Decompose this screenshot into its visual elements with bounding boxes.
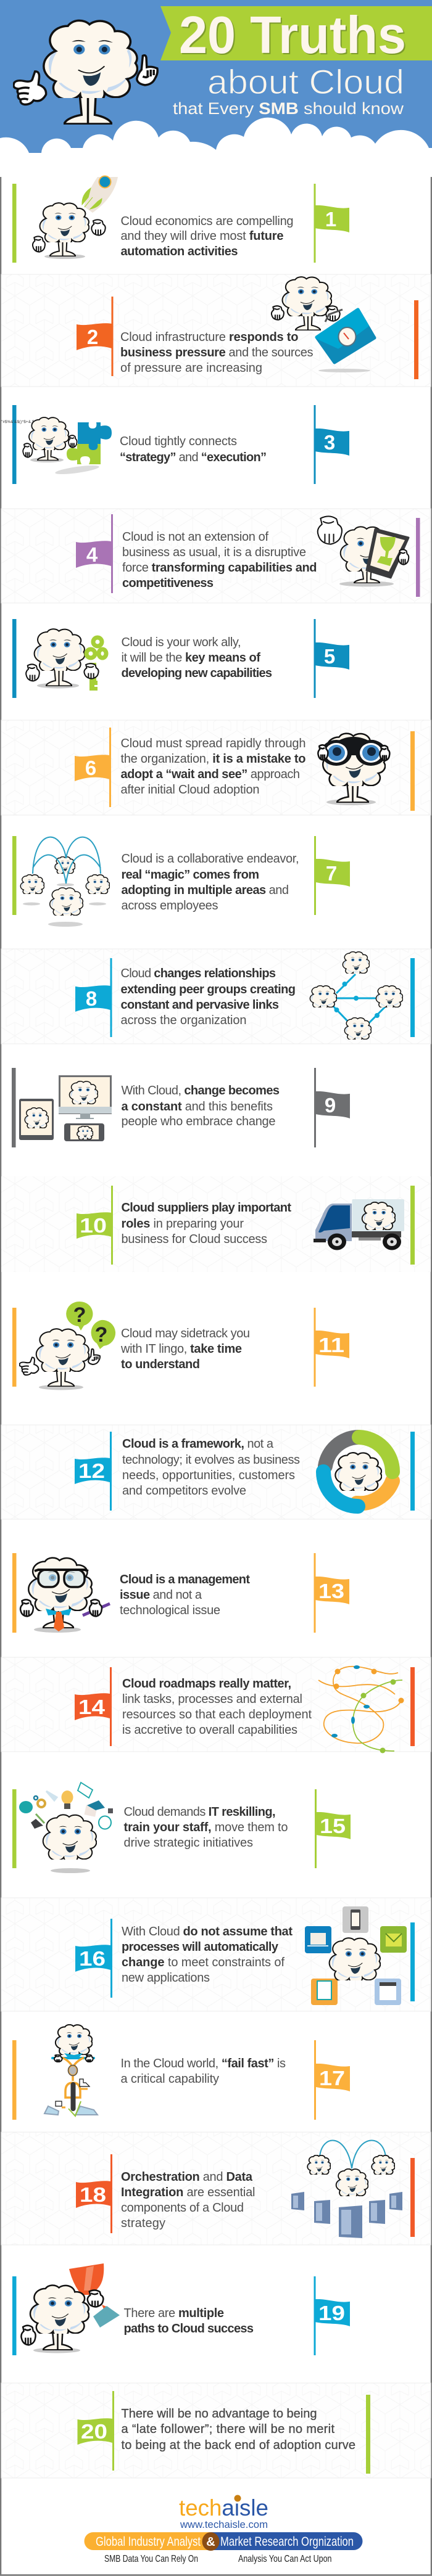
flag 15	[317, 1812, 351, 1839]
bars	[12, 1789, 317, 1868]
text: new applications	[122, 1971, 210, 1985]
text	[120, 330, 314, 375]
band	[1, 2132, 431, 2245]
flag 11	[315, 1331, 349, 1358]
row 6	[1, 720, 431, 815]
flag 4: 4	[86, 543, 98, 566]
graphic: clouds and servers	[291, 2141, 402, 2238]
text: link tasks, processes and external	[122, 1692, 302, 1706]
text: resources so that each deployment	[122, 1708, 312, 1721]
row 8	[1, 949, 431, 1044]
band	[1, 509, 431, 603]
text	[120, 1573, 250, 1617]
bars	[12, 1553, 316, 1633]
band	[1, 720, 431, 815]
text: force transforming capabilities and	[122, 561, 317, 575]
band	[1, 1425, 431, 1519]
flag 5	[315, 642, 349, 670]
row 19	[12, 2263, 350, 2355]
icon: rocket	[82, 176, 118, 213]
title ribbon	[160, 6, 432, 60]
text	[121, 215, 294, 258]
row 14	[1, 1657, 431, 1754]
slogan left: SMB Data You Can Rely On	[104, 2554, 198, 2564]
text	[121, 737, 306, 797]
flag 12: 12	[78, 1459, 105, 1482]
icon: clipboard tile	[311, 1979, 338, 2005]
row 12	[1, 1425, 431, 1519]
flag 3: 3	[324, 431, 335, 454]
text: business for Cloud success	[121, 1233, 267, 1246]
icon: chart	[87, 1800, 105, 1810]
mascot with binoculars	[318, 734, 389, 805]
text: Integration are essential	[121, 2186, 255, 2199]
mascot with question bubbles	[20, 1302, 115, 1390]
mascot on unicycle	[44, 2025, 98, 2116]
text: needs, opportunities, customers	[122, 1469, 295, 1482]
text	[120, 435, 267, 464]
text	[121, 852, 299, 913]
bars	[12, 836, 316, 915]
band	[1, 2383, 431, 2478]
text: across employees	[121, 899, 218, 913]
graphic: linked clouds	[310, 952, 403, 1041]
tagline pill: Global Industry Analyst	[96, 2535, 201, 2549]
text	[121, 967, 296, 1027]
text: Cloud roadmaps really matter,	[122, 1677, 291, 1691]
flag 9: 9	[325, 1094, 336, 1117]
tagline pill: &	[206, 2535, 215, 2549]
row 9	[12, 1068, 350, 1147]
text: paths to Cloud success	[123, 2322, 254, 2336]
chart: ring around cloud	[323, 1437, 393, 1506]
text: to understand	[121, 1358, 200, 1371]
text	[121, 2170, 255, 2230]
text	[122, 530, 317, 590]
icon: calendar tile	[375, 1979, 401, 2005]
row 17	[12, 2025, 350, 2120]
mascot with trophy	[21, 2263, 120, 2353]
text: “strategy” and “execution”	[120, 451, 267, 464]
flag 3	[315, 429, 349, 456]
bars	[12, 184, 316, 263]
flag 11: 11	[318, 1334, 344, 1356]
text: extending peer groups creating	[121, 983, 296, 996]
flag 19: 19	[318, 2302, 345, 2324]
subtitle: that every SMB: that Every SMB should know	[173, 99, 404, 118]
icon: clock	[99, 1816, 111, 1829]
flag 12	[75, 1458, 110, 1484]
logo: techaisle: techaisle	[179, 2495, 268, 2521]
icon: gear	[38, 1800, 45, 1807]
cloud bank	[0, 118, 432, 176]
graphic: roadmap paths	[318, 1665, 404, 1754]
text: across the organization	[121, 1014, 247, 1027]
text: constant and pervasive links	[121, 998, 279, 1012]
flag 13: 13	[318, 1580, 344, 1602]
icon: laptop tile	[305, 1926, 331, 1953]
bars	[12, 1308, 316, 1387]
bars	[111, 514, 420, 597]
flag 14	[75, 1693, 110, 1720]
flag 20	[78, 2418, 112, 2445]
icon: mail tile	[380, 1926, 407, 1953]
mascot with key	[26, 629, 106, 691]
flag 7: 7	[326, 862, 337, 885]
text: Cloud is not an extension of	[122, 530, 268, 544]
text: of pressure are increasing	[120, 361, 262, 375]
graphic: devices	[19, 1075, 112, 1141]
text: adopt a “wait and see” approach	[121, 768, 300, 781]
row 2	[1, 274, 431, 387]
mascot with puzzle	[23, 417, 112, 476]
text: train your staff, move them to	[123, 1821, 288, 1834]
flag 1	[315, 205, 349, 232]
text	[121, 1084, 280, 1128]
bars	[12, 2276, 316, 2355]
bars	[12, 2040, 316, 2120]
bars	[111, 297, 418, 379]
header sky	[0, 0, 432, 157]
text: With Cloud, change becomes	[121, 1084, 280, 1097]
flag 13	[315, 1577, 349, 1604]
title: 20 Truths	[179, 6, 406, 65]
text: roles in preparing your	[121, 1217, 244, 1231]
text: Cloud may sidetrack you	[121, 1327, 250, 1340]
row 3	[1, 405, 349, 484]
graphic: app icons around cloud	[305, 1906, 407, 2005]
mascot	[33, 203, 106, 259]
band	[1, 1657, 431, 1752]
text: is accretive to overall capabilities	[122, 1723, 297, 1737]
row 16	[1, 1898, 431, 2011]
text	[121, 1201, 291, 1246]
flag 9	[316, 1091, 350, 1118]
flag 7	[316, 859, 350, 887]
flag 17: 17	[319, 2067, 345, 2090]
text: Cloud must spread rapidly through	[121, 737, 306, 750]
mascot with question bubbles: ?	[73, 1303, 86, 1327]
text: Cloud changes relationships	[121, 967, 276, 980]
text	[122, 1925, 293, 1985]
text	[121, 2057, 286, 2086]
icon: bulb	[62, 1790, 73, 1809]
mascot with question bubbles: ?	[95, 1323, 107, 1347]
text: change to meet constraints of	[122, 1956, 285, 1969]
flag 10: 10	[80, 1214, 107, 1237]
text: and competitors evolve	[122, 1484, 246, 1498]
subtitle: about Cloud: about Cloud	[207, 62, 404, 101]
flag 19	[315, 2299, 350, 2326]
text: In the Cloud world, “fail fast” is	[121, 2057, 286, 2070]
text: There will be no advantage to being	[121, 2407, 317, 2421]
text: Cloud is a framework, not a	[122, 1437, 274, 1451]
text: Cloud is a collaborative endeavor,	[121, 852, 299, 866]
flag 20: 20	[81, 2420, 107, 2443]
text: Cloud tightly connects	[120, 435, 237, 448]
text: strategy	[121, 2217, 165, 2230]
text: There are multiple	[123, 2307, 224, 2320]
text: automation activities	[121, 245, 238, 258]
band	[1, 1176, 431, 1272]
bars	[111, 1186, 415, 1265]
text: Cloud economics are compelling	[121, 215, 294, 228]
icon: small box	[108, 1808, 113, 1813]
bars	[12, 619, 316, 698]
flag 4	[76, 541, 111, 568]
text	[123, 2307, 254, 2336]
text	[121, 636, 272, 680]
row 5	[12, 619, 349, 698]
flag 2: 2	[87, 326, 98, 348]
text: people who embrace change	[121, 1115, 275, 1128]
text: the organization, it is a mistake to	[121, 752, 306, 766]
text: a constant and this benefits	[121, 1100, 273, 1114]
graphic: truck	[314, 1199, 404, 1250]
text	[122, 1437, 300, 1498]
flag 8: 8	[86, 987, 97, 1010]
band	[1, 949, 431, 1044]
row 13	[12, 1553, 349, 1633]
text: Cloud demands IT reskilling,	[123, 1805, 275, 1819]
mascot with glasses and tie	[20, 1558, 110, 1633]
bars	[110, 2154, 415, 2237]
text	[121, 2407, 355, 2452]
tagline pill: Market Research Orgnization	[220, 2535, 354, 2549]
icon: calendar	[85, 1805, 97, 1817]
bars	[110, 1667, 415, 1746]
text: and they will drive most future	[121, 229, 284, 243]
row 20	[1, 2383, 431, 2478]
header	[0, 0, 432, 176]
row 11	[12, 1302, 349, 1390]
text: developing new capabilities	[121, 667, 272, 680]
stray label: "#$%&'&$()*$+&,$./0$1,$	[1, 420, 48, 424]
flag 17	[316, 2064, 350, 2091]
bars	[110, 1919, 415, 2001]
flag 2	[77, 323, 112, 350]
flag 16	[75, 1945, 110, 1972]
text: Orchestration and Data	[121, 2170, 253, 2184]
text: technological issue	[120, 1604, 220, 1617]
bars	[12, 405, 316, 484]
flag 10	[77, 1212, 112, 1239]
text	[122, 1677, 312, 1737]
footer	[84, 2495, 363, 2564]
icon: megaphone	[31, 1819, 43, 1829]
icon: document	[78, 1782, 93, 1798]
text: drive strategic initiatives	[123, 1836, 253, 1850]
mascot with ideas	[19, 1782, 113, 1873]
bars	[110, 958, 415, 1037]
text: after initial Cloud adoption	[121, 783, 259, 797]
text: Cloud is a management	[120, 1573, 250, 1586]
text: processes will automatically	[122, 1940, 279, 1954]
bars	[112, 2391, 370, 2474]
flag 18: 18	[80, 2183, 106, 2206]
text: business pressure and the sources	[120, 346, 314, 359]
flag 15: 15	[320, 1815, 346, 1837]
flag 16: 16	[79, 1947, 106, 1970]
flag 6: 6	[85, 757, 96, 779]
flag 1: 1	[325, 208, 336, 231]
flag 8	[75, 985, 110, 1012]
row 7	[12, 836, 350, 927]
row 4	[1, 509, 431, 603]
band	[1, 274, 431, 387]
tagline pill	[84, 2532, 363, 2551]
text: issue and not a	[120, 1588, 202, 1602]
text: adopting in multiple areas and	[121, 884, 289, 897]
text: Cloud infrastructure responds to	[120, 330, 299, 344]
text: a critical capability	[121, 2072, 219, 2086]
text: Cloud is your work ally,	[121, 636, 241, 649]
icon: small gear	[34, 1796, 38, 1800]
flag 5: 5	[324, 645, 335, 668]
text: with IT lingo, take time	[120, 1342, 242, 1356]
text: a “late follower”; there will be no merit	[121, 2422, 334, 2436]
text	[120, 1327, 250, 1371]
icon: envelope	[46, 1791, 57, 1800]
text: technology; it evolves as business	[122, 1453, 300, 1467]
text: it will be the key means of	[121, 651, 260, 665]
text: real “magic” comes from	[121, 868, 259, 882]
mascot with tablet	[318, 516, 409, 587]
text: business as usual, it is a disruptive	[122, 546, 306, 559]
bars	[109, 728, 415, 811]
bars	[12, 1068, 316, 1147]
text: to being at the back end of adoption curve	[121, 2439, 355, 2452]
slogan right: Analysis You Can Act Upon	[238, 2554, 332, 2564]
flag 18	[76, 2181, 111, 2208]
flag 14: 14	[78, 1696, 106, 1718]
icon: phone tile	[343, 1906, 368, 1933]
row 18	[1, 2132, 431, 2245]
text: competitiveness	[122, 576, 214, 590]
row 1	[12, 176, 349, 263]
row 10	[1, 1176, 431, 1272]
flag 6	[75, 755, 110, 781]
icon: pencil	[36, 1814, 44, 1823]
text	[123, 1805, 288, 1850]
mascot: big cloud	[14, 20, 157, 124]
band	[1, 1898, 431, 2011]
website: www.techaisle.com	[180, 2519, 268, 2530]
text: components of a Cloud	[121, 2201, 244, 2215]
text: Cloud suppliers play important	[121, 1201, 291, 1215]
bars	[110, 1432, 415, 1511]
row 15	[12, 1782, 351, 1873]
graphic: collaborating clouds	[20, 837, 110, 927]
text: With Cloud do not assume that	[122, 1925, 293, 1938]
icon: globe	[19, 1801, 33, 1813]
mascot with briefcase	[272, 277, 375, 372]
